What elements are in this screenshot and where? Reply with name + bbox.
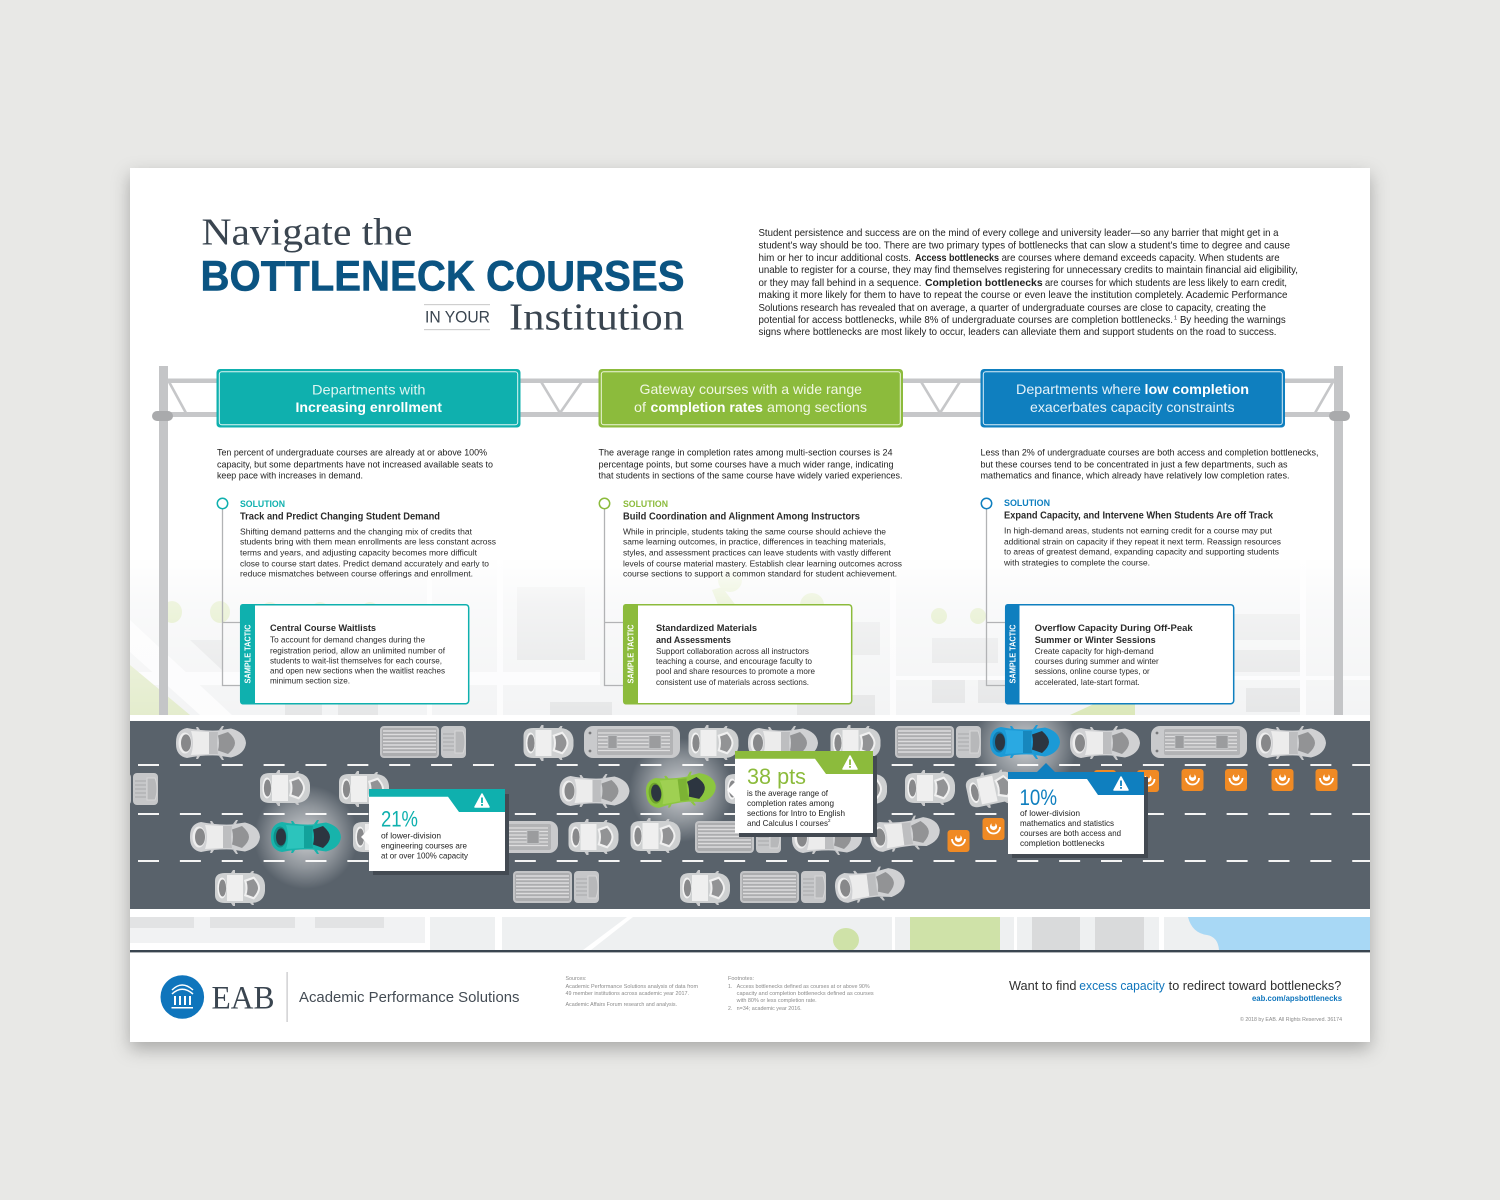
footer rule: [130, 950, 1370, 952]
sample tactic card: SAMPLE TACTIC: [626, 624, 636, 684]
call to action: excess capacity: [1079, 979, 1166, 993]
callout: 38 pts: completion rates among: [747, 799, 834, 808]
sign: increasing enrollment: Increasing enrollment: [296, 399, 442, 415]
solution text: additional strain on capacity if they repeat it next term. Reassign resources: [1004, 536, 1282, 546]
sample tactic card: sessions, online course types, or: [1035, 667, 1150, 676]
sample tactic card: courses during summer and winter: [1035, 657, 1159, 666]
callout: 38 pts: is the average range of: [747, 789, 829, 798]
poster sheet: [130, 168, 1370, 1042]
sample tactic card: Central Course Waitlists: [270, 622, 376, 633]
solution text: styles, and assessment practices can leave students with vastly different: [623, 548, 892, 558]
footnotes: n=34; academic year 2016.: [737, 1006, 802, 1012]
panel: completion rates: [598, 369, 903, 704]
lead paragraph: keep pace with increases in demand.: [217, 470, 363, 480]
callout: 21%: of lower-division: [381, 832, 441, 840]
solution text: Shifting demand patterns and the changing mix of credits that: [240, 526, 473, 536]
icon: warning: [475, 794, 489, 807]
connector line: [986, 508, 1005, 686]
sign: completion rates: among sections: [767, 399, 867, 415]
intro paragraph: signs where bottlenecks are most likely to occur, leaders can alleviate them and support students on the road to success.: [758, 327, 1276, 338]
sample tactic card: Summer or Winter Sessions: [1035, 634, 1156, 645]
sources: Academic Performance Solutions analysis of data from: [566, 984, 698, 990]
solution text: reduce mismatches between course offerings and enrollment.: [240, 568, 473, 578]
title line: IN YOUR: IN YOUR: [425, 308, 490, 327]
solution text: with strategies to complete the course.: [1003, 558, 1150, 568]
call to action: © 2018 by EAB. All Rights Reserved. 36174: [1240, 1016, 1342, 1023]
intro paragraph: or they may fall behind in a sequence.: [758, 278, 922, 289]
connector line: [604, 508, 623, 686]
sources: 49 member institutions across academic year 2017.: [566, 991, 689, 997]
EAB logo: [160, 972, 520, 1022]
callout: 21%: at or over 100% capacity: [381, 852, 469, 860]
intro paragraph: Completion bottlenecks: [925, 278, 1043, 289]
callout: 38 pts: 38 pts: [747, 764, 806, 789]
sign: increasing enrollment: [216, 369, 520, 428]
callout: 38 pts: 2: [828, 818, 831, 823]
panel: increasing enrollment: [216, 369, 520, 704]
intro paragraph: By heeding the warnings: [1180, 315, 1286, 326]
sources: Academic Affairs Forum research and analysis.: [566, 1002, 677, 1008]
footnotes: [728, 976, 874, 1012]
sign: completion rates: Gateway courses with a wide range: [640, 381, 862, 397]
solution text: to areas of greatest demand, expanding capacity and supporting students: [1004, 546, 1280, 556]
grey traffic: [72, 725, 1326, 906]
solution text: While in principle, students taking the same course should achieve the: [623, 526, 886, 536]
callout: 38 pts: sections for Intro to English: [747, 809, 845, 818]
lead paragraph: Ten percent of undergraduate courses are already at or above 100%: [217, 448, 487, 458]
overhead sign gantry: [152, 366, 1350, 715]
blue car: [990, 725, 1060, 759]
solution text: SOLUTION: [1004, 498, 1050, 508]
icon: warning: [1114, 777, 1128, 790]
sign: increasing enrollment: Departments with: [312, 382, 426, 398]
lead paragraph: mathematics and finance, which already have relatively low completion rates.: [980, 470, 1290, 480]
intro paragraph: student's way should be too. There are two primary types of bottlenecks that can slow a student's time to degree and cause: [758, 240, 1290, 252]
solution text: terms and years, and adjusting capacity becomes more difficult: [240, 548, 478, 558]
sample tactic card: [1005, 604, 1234, 704]
sample tactic card: pool and share resources to promote a more: [656, 667, 815, 676]
solution marker: [599, 498, 610, 509]
callout: 21%: [361, 789, 509, 875]
solution text: same learning outcomes, in practice, differences in teaching materials,: [623, 536, 886, 546]
sample tactic card: accelerated, late-start format.: [1035, 678, 1140, 687]
footnotes: capacity and completion bottlenecks defined as courses: [737, 991, 874, 997]
sample tactic card: SAMPLE TACTIC: [242, 624, 252, 684]
callout: 10%: completion bottlenecks: [1020, 839, 1104, 848]
orange traffic cones: [948, 769, 1338, 852]
solution text: In high-demand areas, students not earning credit for a course may put: [1004, 526, 1273, 536]
lead paragraph: but these courses tend to be concentrated in just a few departments, such as: [980, 460, 1288, 470]
solution text: SOLUTION: [623, 499, 668, 509]
sample tactic card: consistent use of materials across sections.: [656, 678, 809, 687]
solution text: SOLUTION: [240, 499, 285, 509]
title: [200, 212, 684, 338]
sample tactic card: SAMPLE TACTIC: [1008, 624, 1018, 684]
connector line: [222, 508, 240, 686]
solution text: Track and Predict Changing Student Demand: [240, 512, 440, 522]
intro paragraph: unable to register for a course, they may find themselves registering for unnecessary credits to maintain financial aid eligibility,: [758, 265, 1298, 276]
intro paragraph: Student persistence and success are on the mind of every college and university leader—so any barrier that might get in a: [758, 228, 1279, 239]
solution text: [623, 499, 903, 578]
road with traffic: [130, 721, 1370, 909]
sample tactic card: minimum section size.: [270, 676, 350, 686]
solution text: Expand Capacity, and Intervene When Students Are off Track: [1004, 510, 1273, 522]
sample tactic card: students to wait-list themselves for each course,: [270, 656, 442, 666]
sample tactic card: Support collaboration across all instructors: [656, 647, 809, 656]
sources: Sources:: [566, 976, 586, 982]
solution text: course sections to support a common standard for student achievement.: [623, 568, 897, 578]
icon: EAB building: [160, 975, 204, 1019]
sample tactic card: To account for demand changes during the: [270, 636, 425, 644]
lead paragraph: percentage points, but some courses have a much wider range, indicating: [598, 460, 894, 470]
lower map strip: [130, 917, 1370, 952]
callout: 10%: of lower-division: [1020, 809, 1080, 818]
sample tactic card: Overflow Capacity During Off-Peak: [1035, 622, 1193, 633]
sign: low completion: Departments where: [1016, 381, 1141, 397]
call to action: eab.com/apsbottlenecks: [1252, 994, 1343, 1003]
title line: Institution: Institution: [509, 296, 684, 338]
intro paragraph: Solutions research has revealed that on average, a quarter of undergraduate courses are close to capacity, creating the: [758, 303, 1266, 314]
sign: completion rates: of: [634, 399, 646, 415]
sample tactic card: Create capacity for high-demand: [1035, 647, 1154, 656]
callout: 21%: engineering courses are: [381, 842, 467, 850]
solution text: [1003, 498, 1282, 568]
title line: IN YOUR: [424, 304, 490, 330]
footnotes: with 80% or less completion rate.: [737, 998, 817, 1004]
intro paragraph: [758, 228, 1298, 338]
EAB logo: Academic Performance Solutions: [299, 989, 520, 1006]
intro paragraph: him or her to incur additional costs.: [758, 253, 911, 264]
callout: 38 pts: [727, 751, 877, 837]
sample tactic card: registration period, allow an unlimited number of: [270, 646, 446, 656]
intro paragraph: 1: [1174, 316, 1177, 322]
callout: 21%: 21%: [381, 807, 418, 832]
sample tactic card: and Assessments: [656, 634, 731, 645]
intro paragraph: potential for access bottlenecks, while 8% of undergraduate courses are completion bottlenecks.: [758, 315, 1173, 326]
EAB logo: EAB: [212, 980, 274, 1016]
sample tactic card: teaching a course, and encourage faculty to: [656, 657, 812, 666]
lead paragraph: The average range in completion rates among multi-section courses is 24: [598, 448, 892, 458]
solution marker: [981, 498, 992, 509]
lead paragraph: Less than 2% of undergraduate courses are both access and completion bottlenecks,: [980, 448, 1318, 458]
sample tactic card: Standardized Materials: [656, 622, 757, 633]
lead paragraph: [980, 448, 1318, 480]
sample tactic card: [623, 604, 852, 704]
callout: 10%: courses are both access and: [1020, 829, 1121, 838]
call to action: [1009, 979, 1343, 1023]
call to action: to redirect toward bottlenecks?: [1169, 979, 1341, 993]
footnotes: 1.: [728, 984, 732, 990]
callout: 10%: mathematics and statistics: [1020, 819, 1114, 828]
teal car: [271, 820, 341, 854]
solution text: levels of course material mastery. Establish clear learning outcomes across: [623, 558, 903, 568]
callout: 10%: [1008, 763, 1148, 858]
call to action: Want to find: [1009, 979, 1077, 993]
sign: completion rates: completion rates: [650, 399, 763, 415]
sample tactic card: and open new sections when the waitlist reaches: [270, 666, 445, 676]
title line: BOTTLENECK COURSES: BOTTLENECK COURSES: [200, 252, 684, 300]
footnotes: Footnotes:: [728, 976, 754, 982]
sources: [566, 976, 698, 1008]
sign: completion rates: [598, 369, 903, 428]
intro paragraph: are courses for which students are less likely to earn credit,: [1045, 278, 1287, 289]
lead paragraph: capacity, but some departments have not increased available seats to: [217, 460, 493, 470]
footnotes: Access bottlenecks defined as courses at or above 90%: [737, 984, 870, 990]
solution text: close to course start dates. Predict demand accurately and early to: [240, 558, 489, 568]
sign: low completion: exacerbates capacity constraints: [1030, 399, 1234, 415]
icon: warning: [843, 756, 857, 769]
green car: [644, 769, 718, 811]
panel: low completion: [980, 369, 1318, 704]
lead paragraph: [598, 448, 902, 480]
footnotes: 2.: [728, 1006, 732, 1012]
lead paragraph: that students in sections of the same course have widely varied experiences.: [598, 470, 902, 480]
solution text: [240, 499, 497, 578]
sign: low completion: low completion: [1144, 381, 1249, 397]
intro paragraph: Access bottlenecks: [915, 253, 999, 264]
lead paragraph: [217, 448, 493, 480]
intro paragraph: making it more likely for them to have to repeat the course or even leave the institution completely. Academic Performance: [758, 290, 1288, 301]
callout: 10%: 10%: [1020, 785, 1057, 810]
callout: 38 pts: and Calculus I courses: [747, 819, 828, 828]
sample tactic card: [240, 604, 469, 704]
faint city map background: [130, 555, 1370, 716]
intro paragraph: are courses where demand exceeds capacity. When students are: [1002, 253, 1280, 264]
solution marker: [217, 498, 228, 509]
title line: Navigate the: Navigate the: [202, 212, 412, 254]
solution text: Build Coordination and Alignment Among Instructors: [623, 512, 860, 522]
sign: low completion: [980, 369, 1285, 428]
solution text: students bring with them mean enrollments are less constant across: [240, 536, 497, 546]
